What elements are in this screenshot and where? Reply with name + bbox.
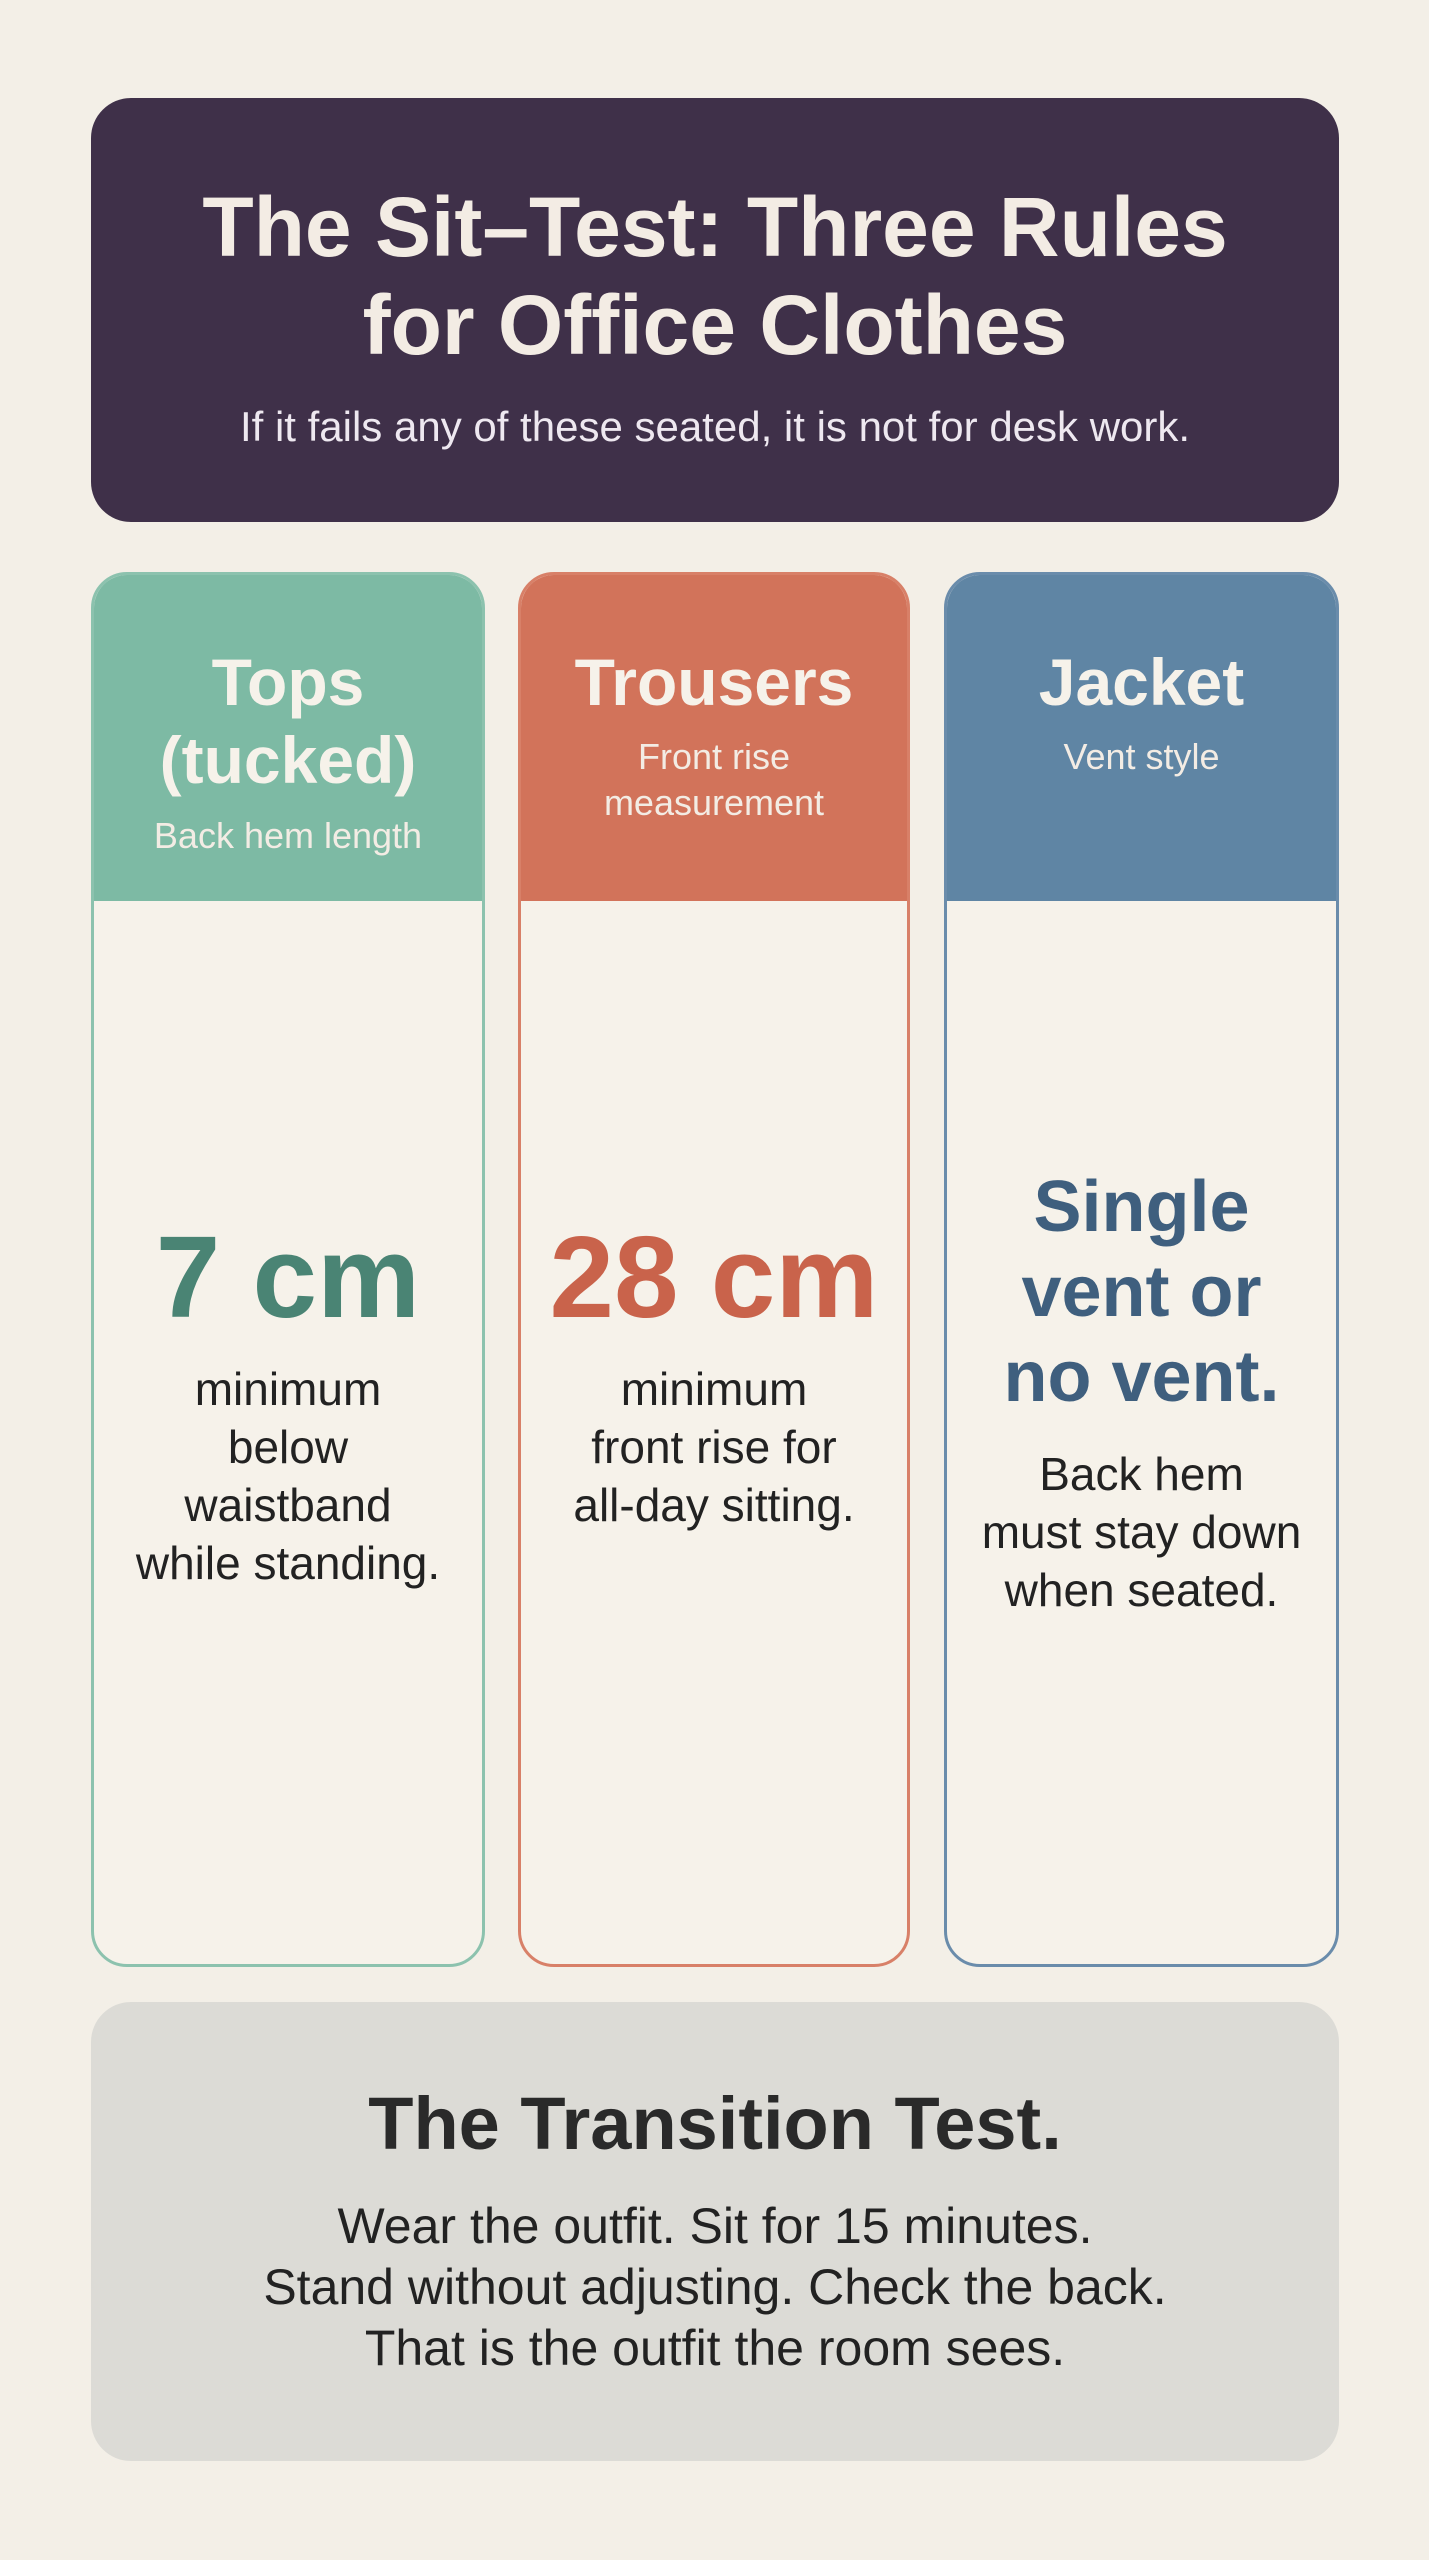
header: trousers: Trousers bbox=[575, 645, 853, 719]
text: trousers: minimum bbox=[621, 1363, 807, 1415]
title bbox=[202, 180, 1228, 372]
number: 28 cm: 28 cm bbox=[550, 1212, 878, 1342]
subtitle: If it fails any of these seated, it is not for desk work. bbox=[240, 403, 1190, 450]
text: Stand without adjusting. Check the back. bbox=[263, 2259, 1167, 2315]
header: tops: Back hem length bbox=[154, 815, 422, 856]
panel: trousers bbox=[518, 572, 910, 1967]
title: for Office Clothes bbox=[363, 278, 1067, 372]
text: trousers bbox=[573, 1363, 855, 1531]
text: trousers: all-day sitting. bbox=[573, 1479, 855, 1531]
title panel bbox=[91, 98, 1339, 522]
title: The Sit–Test: Three Rules bbox=[202, 180, 1228, 274]
text: jacket: must stay down bbox=[982, 1506, 1301, 1558]
header: trousers bbox=[521, 575, 907, 901]
text: jacket: Back hem bbox=[1039, 1448, 1244, 1500]
panel: tops bbox=[91, 572, 485, 1967]
text: tops: waistband bbox=[184, 1479, 392, 1531]
text: tops: while standing. bbox=[136, 1537, 440, 1589]
panel: jacket bbox=[944, 572, 1339, 1967]
panel: transition test bbox=[91, 2002, 1339, 2461]
text: That is the outfit the room sees. bbox=[365, 2320, 1065, 2376]
header: jacket: Jacket bbox=[1039, 645, 1244, 719]
heading: The Transition Test. bbox=[368, 2082, 1062, 2165]
number: 7 cm: 7 cm bbox=[156, 1212, 420, 1342]
header: trousers: Front rise bbox=[638, 736, 790, 777]
text: trousers: front rise for bbox=[591, 1421, 837, 1473]
text: tops bbox=[136, 1363, 440, 1589]
text: tops: minimum bbox=[195, 1363, 381, 1415]
text: jacket bbox=[982, 1448, 1301, 1616]
header: tops: Tops bbox=[212, 645, 364, 719]
heading: single vent bbox=[1003, 1167, 1280, 1417]
text bbox=[263, 2198, 1167, 2376]
header: tops: (tucked) bbox=[160, 723, 416, 797]
header: jacket bbox=[947, 575, 1336, 901]
heading: single vent: vent or bbox=[1021, 1252, 1262, 1332]
header: trousers: measurement bbox=[604, 782, 824, 823]
text: tops: below bbox=[228, 1421, 348, 1473]
text: Wear the outfit. Sit for 15 minutes. bbox=[338, 2198, 1092, 2254]
header: tops bbox=[94, 575, 482, 901]
heading: single vent: Single bbox=[1033, 1167, 1250, 1247]
text: jacket: when seated. bbox=[1005, 1564, 1278, 1616]
header: jacket: Vent style bbox=[1063, 736, 1220, 777]
heading: single vent: no vent. bbox=[1003, 1337, 1280, 1417]
